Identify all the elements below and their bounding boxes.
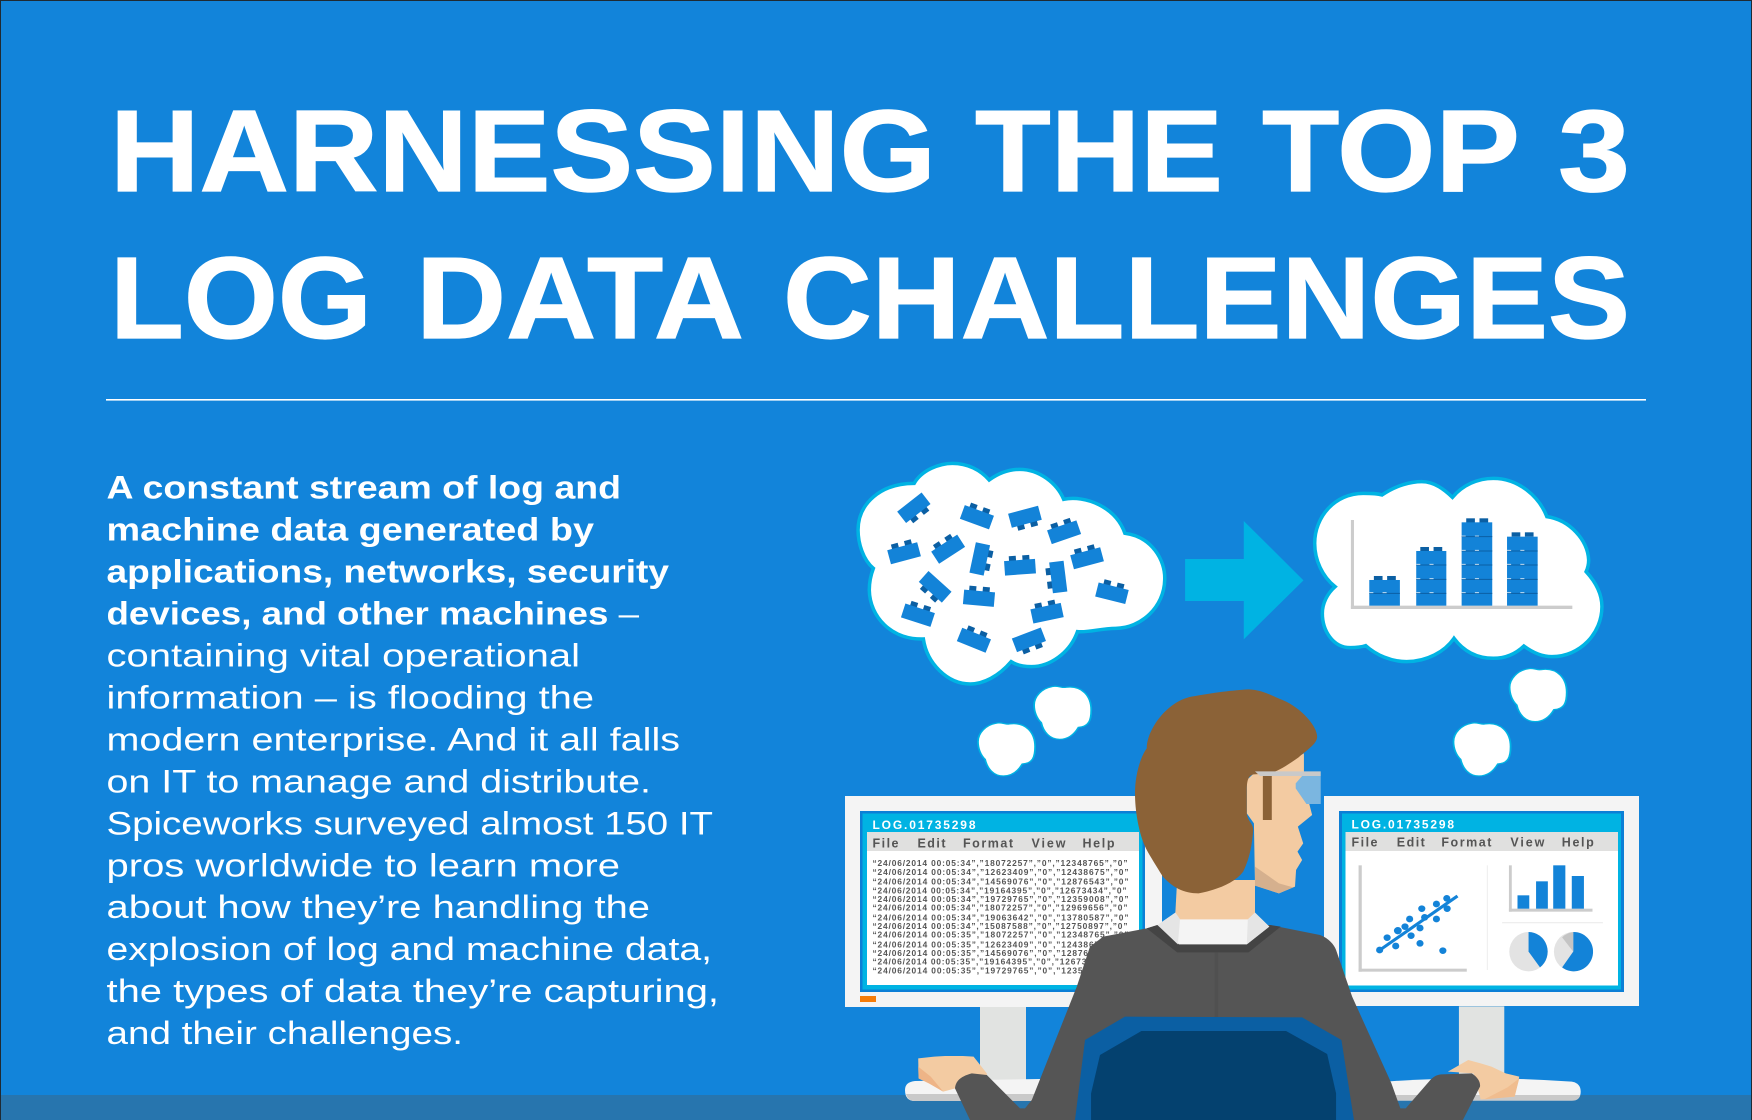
left monitor stand and keyboard bbox=[905, 1006, 1040, 1101]
intro paragraph: applications, networks, security bbox=[106, 553, 669, 589]
person at desk bbox=[918, 689, 1519, 1120]
window menu: Format bbox=[963, 836, 1014, 850]
scattered bricks bbox=[886, 493, 1130, 656]
power light bbox=[860, 996, 876, 1002]
torso seam bbox=[1215, 943, 1218, 1018]
left monitor bbox=[845, 796, 1162, 1007]
face bbox=[1247, 753, 1312, 893]
title: HARNESSING bbox=[110, 86, 936, 216]
right monitor stand and keyboard bbox=[1384, 1006, 1581, 1101]
left cloud bbox=[858, 463, 1165, 684]
intro paragraph: the types of data they’re capturing, bbox=[106, 973, 719, 1009]
pie chart two bbox=[1554, 932, 1593, 971]
log lines: “24/06/2014 00:05:34”,”19729765”,”0”,”12359008”,”0” bbox=[872, 894, 1128, 904]
window menu: Help bbox=[1562, 836, 1594, 850]
log lines: “24/06/2014 00:05:35”,”12623409”,”0”,”12438675”,”0” bbox=[872, 939, 1128, 949]
log lines: “24/06/2014 00:05:34”,”18072257”,”0”,”12348765”,”0” bbox=[872, 858, 1128, 868]
arrow bbox=[1185, 521, 1303, 639]
torso and arms bbox=[955, 925, 1480, 1120]
intro paragraph: containing vital operational bbox=[106, 638, 580, 674]
window title: LOG.01735298 bbox=[1352, 818, 1454, 832]
intro paragraph: and their challenges. bbox=[106, 1015, 463, 1051]
small thought puffs bbox=[978, 669, 1567, 776]
intro paragraph: modern enterprise. And it all falls bbox=[106, 721, 680, 757]
window title: LOG.01735298 bbox=[872, 818, 976, 832]
intro paragraph bbox=[106, 470, 719, 1051]
intro paragraph: pros worldwide to learn more bbox=[106, 847, 620, 883]
title: LOG bbox=[110, 233, 372, 363]
log lines bbox=[872, 858, 1128, 976]
right monitor bbox=[1324, 796, 1639, 1006]
glasses bbox=[1255, 771, 1321, 820]
log lines: “24/06/2014 00:05:34”,”18072257”,”0”,”12969656”,”0” bbox=[872, 903, 1128, 913]
stacked brick bar chart bbox=[1351, 518, 1572, 609]
title: CHALLENGES bbox=[783, 233, 1630, 363]
title: TOP bbox=[1262, 86, 1520, 216]
chair bbox=[1075, 1017, 1354, 1120]
right hand bbox=[1448, 1060, 1519, 1099]
intro paragraph: about how they’re handling the bbox=[106, 889, 650, 925]
window menu: Edit bbox=[1397, 836, 1426, 850]
intro paragraph: on IT to manage and distribute. bbox=[106, 763, 651, 799]
title: DATA bbox=[416, 233, 744, 363]
intro paragraph: machine data generated by bbox=[106, 511, 594, 547]
intro paragraph: explosion of log and machine data, bbox=[106, 931, 712, 967]
left hand bbox=[918, 1056, 987, 1092]
window menu bbox=[1352, 836, 1594, 850]
intro paragraph: Spiceworks surveyed almost 150 IT bbox=[106, 805, 713, 841]
window menu: File bbox=[872, 836, 899, 850]
dashboard charts bbox=[1359, 865, 1603, 972]
log lines: “24/06/2014 00:05:34”,”19164395”,”0”,”12673434”,”0” bbox=[872, 885, 1126, 895]
window menu: Help bbox=[1082, 836, 1115, 850]
log lines: “24/06/2014 00:05:34”,”19063642”,”0”,”13780587”,”0” bbox=[872, 912, 1128, 922]
log lines: “24/06/2014 00:05:35”,”18072257”,”0”,”12348765”,”0” bbox=[872, 930, 1128, 940]
window menu: Format bbox=[1441, 836, 1492, 850]
pie chart one bbox=[1509, 932, 1548, 971]
neck bbox=[1175, 880, 1255, 925]
title bbox=[110, 86, 1630, 363]
desk band bbox=[0, 1095, 1752, 1120]
bar chart bbox=[1509, 865, 1592, 912]
title: THE bbox=[975, 86, 1223, 216]
intro paragraph: information – is flooding the bbox=[106, 680, 594, 716]
window menu bbox=[872, 836, 1115, 850]
log lines: “24/06/2014 00:05:35”,”19729765”,”0”,”12359008”,”0” bbox=[872, 966, 1128, 976]
title: 3 bbox=[1558, 86, 1630, 216]
collar bbox=[1157, 913, 1269, 944]
log lines: “24/06/2014 00:05:34”,”15087588”,”0”,”12750897”,”0” bbox=[872, 921, 1128, 931]
collar shadow bbox=[1147, 925, 1281, 952]
window menu: View bbox=[1510, 836, 1545, 850]
thought clouds with arrow bbox=[858, 463, 1602, 776]
title rule bbox=[106, 399, 1646, 401]
intro paragraph: A constant stream of log and bbox=[106, 470, 621, 506]
hair bbox=[1135, 689, 1317, 893]
window menu: View bbox=[1032, 836, 1066, 850]
intro paragraph: devices, and other machines – bbox=[106, 595, 639, 631]
scatter plot bbox=[1359, 865, 1467, 972]
log lines: “24/06/2014 00:05:34”,”14569076”,”0”,”12876543”,”0” bbox=[872, 876, 1128, 886]
window menu: Edit bbox=[918, 836, 946, 850]
log lines: “24/06/2014 00:05:34”,”12623409”,”0”,”12438675”,”0” bbox=[872, 867, 1128, 877]
log lines: “24/06/2014 00:05:35”,”14569076”,”0”,”12876543”,”0” bbox=[872, 948, 1128, 958]
window menu: File bbox=[1352, 836, 1378, 850]
right cloud bbox=[1315, 478, 1602, 662]
jaw shadow bbox=[1255, 867, 1293, 893]
log lines: “24/06/2014 00:05:35”,”19164395”,”0”,”12673434”,”0” bbox=[872, 957, 1126, 967]
